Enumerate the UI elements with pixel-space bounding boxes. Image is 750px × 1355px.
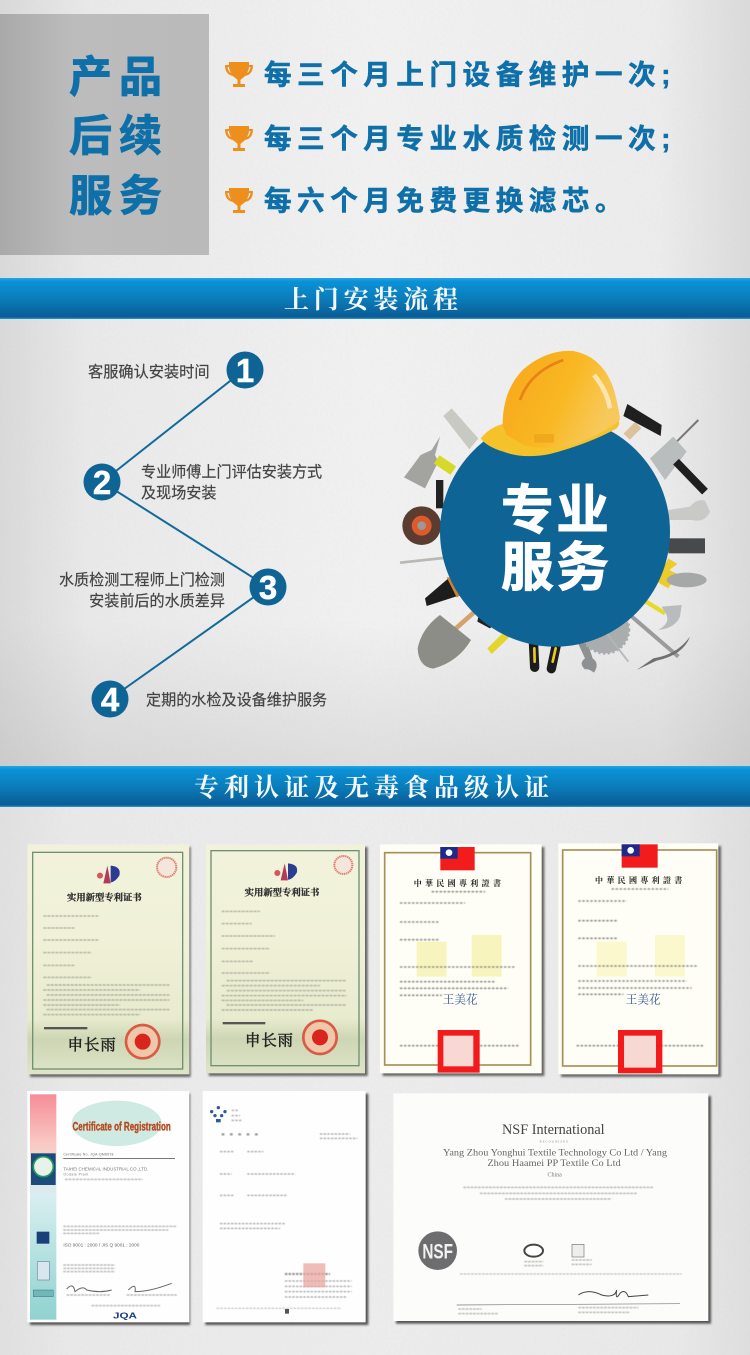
certificate 7: NSF International: Zhou Haamei PP Textile Co Ltd	[487, 1158, 621, 1169]
certificates group row 2	[27, 1091, 368, 1325]
icon: drill	[650, 420, 705, 492]
icon: trophy 2	[225, 126, 253, 151]
step 2: 及现场安装	[141, 485, 216, 502]
step 4	[92, 680, 327, 718]
step 1: 客服确认安装时间	[88, 364, 210, 381]
icon: trophy 1	[225, 62, 253, 87]
list item 1: 每三个月上门设备维护一次;	[264, 59, 676, 90]
certificate 2: utility model patent: 实用新型专利证书	[245, 886, 320, 898]
banner: patents and certification: 专利认证及无毒食品级认证	[194, 774, 554, 802]
certificates group row 1	[27, 844, 368, 1077]
list item 3: 每六个月免费更换滤芯。	[264, 185, 628, 216]
certificate 7: NSF International: Yang Zhou Yonghui Textile Technology Co Ltd / Yang	[443, 1148, 667, 1159]
icon: hammer	[623, 404, 662, 437]
icon: shovel	[418, 609, 477, 669]
icon: ruler	[668, 538, 705, 553]
icon: side cutter	[657, 558, 707, 588]
icon: power tool	[425, 577, 461, 606]
icon: pickaxe	[630, 615, 690, 670]
icon: tape measure	[477, 617, 512, 654]
step 2: 专业师傅上门评估安装方式	[141, 464, 322, 481]
badge text: 专业	[501, 482, 612, 541]
certificate 3: patent certificate: 王美花	[443, 992, 478, 1006]
certificate 7: NSF International: RECOGNIZES	[539, 1139, 568, 1143]
banner: installation process	[0, 278, 750, 319]
icon: saw	[443, 408, 478, 449]
certificate 5: certificate of registration	[27, 1091, 190, 1325]
heading: 产品后续服务	[69, 54, 169, 221]
process flow chart	[59, 352, 327, 718]
step 4: 4	[101, 681, 120, 718]
step 2	[84, 464, 322, 502]
certificate 5: certificate of registration: ISO 9001 : 2000 / JIS Q 9001 : 2000	[63, 1242, 140, 1247]
icon: axe	[404, 437, 453, 488]
icon: wrench	[575, 637, 597, 673]
background: installation section	[0, 318, 750, 766]
certificate 5: certificate of registration: TAIHEI CHEMICAL INDUSTRIAL CO.,LTD.	[63, 1166, 148, 1171]
illustration: professional service badge with tools	[400, 351, 710, 673]
certificate 2: utility model patent: 申长雨	[245, 1033, 294, 1050]
certificate 7: NSF International: NSF	[422, 1239, 453, 1263]
certificate 1: utility model patent: 申长雨	[68, 1037, 117, 1054]
step 3: 水质检测工程师上门检测	[59, 572, 225, 589]
background: top section	[0, 0, 750, 279]
badge circle	[440, 417, 670, 647]
certificate 5: certificate of registration: JQA	[113, 1310, 138, 1320]
step 4: 定期的水检及设备维护服务	[146, 692, 327, 709]
certificate 6: Japanese certificate	[203, 1091, 368, 1325]
heading: 产品后续服务: 服务	[69, 173, 169, 221]
icon: claw hammer	[643, 600, 682, 630]
step 3: 3	[259, 569, 277, 606]
list item 2: 每三个月专业水质检测一次;	[264, 123, 676, 154]
certificate 5: certificate of registration: Certificate No. JQA-QM6578	[63, 1153, 113, 1157]
certificate 4: patent certificate: 王美花	[626, 992, 661, 1006]
certificate 5: certificate of registration: Oodate Plant	[63, 1173, 88, 1177]
certificate 3: patent certificate: 中華民國專利證書	[414, 878, 504, 888]
certificate 7: NSF International	[393, 1093, 711, 1324]
certificate 5: certificate of registration: Certificate of Registration	[72, 1119, 171, 1133]
step 3	[59, 568, 286, 610]
certificate 1: utility model patent: 实用新型专利证书	[67, 892, 142, 904]
certificates group row 1 right	[380, 843, 721, 1077]
icon: open wrench	[668, 500, 710, 521]
step 2: 2	[93, 464, 111, 501]
badge text: 服务	[501, 538, 612, 597]
certificate 2: utility model patent	[206, 844, 368, 1076]
certificate 4: patent certificate	[558, 843, 721, 1077]
background: certificates section	[0, 806, 750, 1355]
icon: pliers	[533, 640, 557, 669]
step 1: 1	[236, 352, 254, 389]
icon: safety helmet	[481, 351, 620, 456]
icon: circular saw blade	[581, 605, 629, 662]
heading: 产品后续服务: 产品	[69, 54, 169, 102]
heading: 产品后续服务: 后续	[69, 113, 169, 161]
step 3: 安装前后的水质差异	[89, 593, 225, 610]
certificate 3: patent certificate	[380, 844, 544, 1076]
certificate 4: patent certificate: 中華民國專利證書	[595, 875, 686, 885]
step 1	[88, 352, 264, 389]
banner: installation process: 上门安装流程	[284, 286, 463, 314]
certificate 7: NSF International: NSF International	[502, 1122, 605, 1138]
service list	[225, 59, 676, 216]
panel: product after-sales service title	[0, 14, 209, 255]
icon: trophy 3	[225, 188, 253, 213]
background: installation section lower shade	[0, 620, 750, 766]
icon: angle grinder	[402, 480, 443, 545]
banner: patents and certification	[0, 766, 750, 807]
icon: screwdriver	[400, 558, 443, 563]
badge text	[501, 482, 612, 597]
certificate 7: NSF International: China	[548, 1172, 562, 1178]
certificate 1: utility model patent	[27, 844, 191, 1077]
